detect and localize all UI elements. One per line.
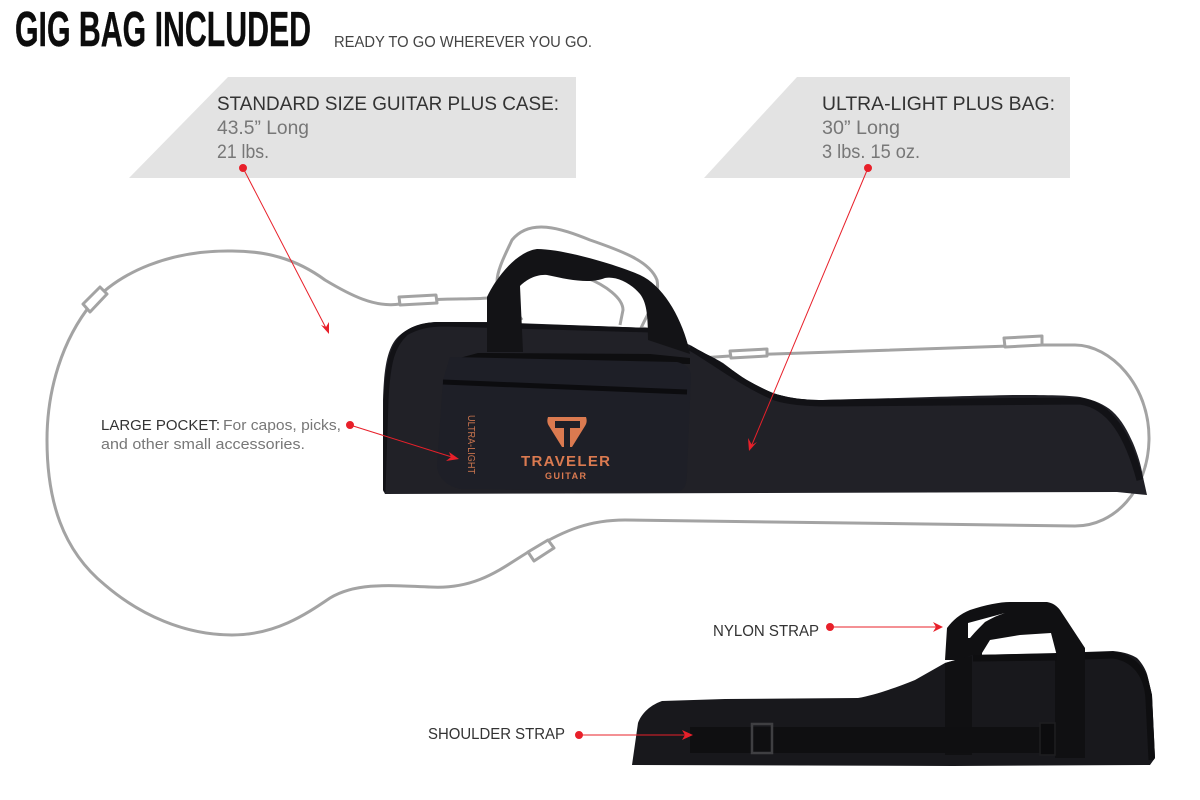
strap buckle: [752, 724, 772, 753]
pocket logo: TRAVELER: [521, 453, 610, 470]
shoulder strap: [690, 727, 1045, 753]
panel: ultra-light bag specs: 30” Long: [822, 118, 900, 139]
panel: standard case specs: 21 lbs.: [217, 142, 269, 163]
callout: shoulder strap: SHOULDER STRAP: [428, 726, 565, 743]
title: GIG BAG INCLUDED: [15, 3, 311, 57]
carry handle: [487, 249, 690, 354]
panel: ultra-light bag specs: 3 lbs. 15 oz.: [822, 142, 920, 163]
arrow: standard case: [240, 164, 329, 334]
guitar case outline: [47, 227, 1149, 635]
panel: standard case specs: 43.5” Long: [217, 118, 309, 139]
handles: [945, 602, 1085, 660]
panel: standard case specs: STANDARD SIZE GUITAR PLUS CASE:: [217, 94, 559, 115]
arrow: shoulder strap: [576, 730, 693, 740]
bag body: [383, 322, 1147, 495]
pocket logo: [465, 415, 610, 481]
bag body: [632, 651, 1155, 766]
case latches: [83, 287, 1042, 561]
gig bag back view: [632, 602, 1155, 766]
panel: standard case specs: [129, 77, 576, 178]
callout: nylon strap: NYLON STRAP: [713, 623, 819, 640]
pocket logo: ULTRA-LIGHT: [465, 415, 477, 475]
gig bag front view: [383, 249, 1147, 495]
panel: ultra-light bag specs: ULTRA-LIGHT PLUS BAG:: [822, 94, 1055, 115]
arrow: large pocket: [346, 422, 459, 461]
callout: large pocket: [101, 417, 341, 453]
bag seam and straps: [945, 652, 1152, 760]
callout: large pocket: LARGE POCKET:: [101, 417, 220, 434]
arrow: ultra-light bag: [748, 164, 872, 451]
pocket logo: GUITAR: [545, 471, 586, 481]
handle base band: [452, 353, 690, 364]
callout: large pocket: For capos, picks,: [223, 417, 341, 434]
zipper seam: [383, 324, 1140, 492]
arrow: nylon strap: [826, 622, 943, 632]
callout: large pocket: and other small accessories.: [101, 436, 305, 453]
pocket: [437, 357, 691, 492]
panel: ultra-light bag specs: [704, 77, 1070, 178]
subtitle: READY TO GO WHEREVER YOU GO.: [334, 34, 592, 51]
